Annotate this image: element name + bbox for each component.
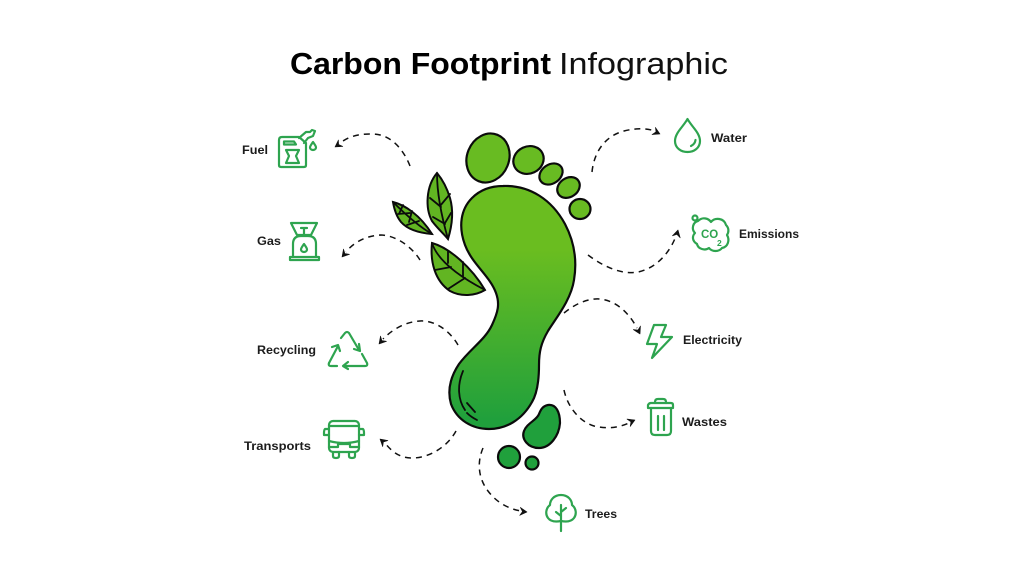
arrow: to gas: [342, 235, 420, 260]
small dot small: [526, 456, 538, 470]
foot sole: [449, 186, 575, 429]
icon: waste bin: [648, 399, 673, 435]
arrow: to trees: [479, 448, 527, 515]
icon: tree: [546, 495, 576, 531]
leaves: [393, 173, 485, 295]
icon: emissions: 2: [717, 238, 722, 248]
arrow: to transports: [380, 431, 456, 458]
label: trees: Trees: [585, 507, 617, 521]
toe 2: [509, 141, 548, 179]
icon: water drop: [675, 119, 700, 152]
footprint: [449, 127, 590, 469]
icon: bus: [324, 421, 364, 458]
toe 3: [535, 159, 567, 189]
icon: fuel can: [279, 130, 316, 167]
title: Infographic: [559, 46, 728, 81]
icon: electricity: [647, 325, 672, 358]
leaf top: [428, 173, 452, 239]
small footprint kidney: [523, 405, 560, 448]
label: fuel: Fuel: [242, 143, 268, 157]
heel highlight: [459, 371, 477, 420]
arrow: to emissions: [588, 230, 680, 273]
arrow: to water: [592, 127, 660, 172]
title: [290, 46, 728, 81]
label: recycling: Recycling: [257, 343, 316, 357]
small dot large: [498, 446, 520, 468]
arrow: to wastes: [564, 390, 635, 428]
leaf bottom: [432, 243, 485, 295]
label: transports: Transports: [244, 439, 311, 453]
arrow: to electricity: [564, 299, 640, 334]
icon: gas stove: [290, 223, 319, 260]
label: water: Water: [711, 131, 747, 145]
label: electricity: Electricity: [683, 333, 742, 347]
toe 4: [553, 173, 584, 202]
icon: emissions: CO: [701, 229, 718, 241]
icon: recycling: [329, 332, 367, 369]
big toe: [459, 127, 517, 189]
leaf left: [393, 202, 432, 234]
toe 5: [570, 199, 590, 219]
label: emissions: Emissions: [739, 227, 799, 241]
icon: emissions: [692, 216, 728, 251]
label: wastes: Wastes: [682, 415, 727, 429]
arrow: to fuel: [335, 134, 410, 166]
title: Carbon Footprint: [290, 46, 551, 81]
arrow: to recycling: [379, 321, 458, 345]
label: gas: Gas: [257, 234, 281, 248]
